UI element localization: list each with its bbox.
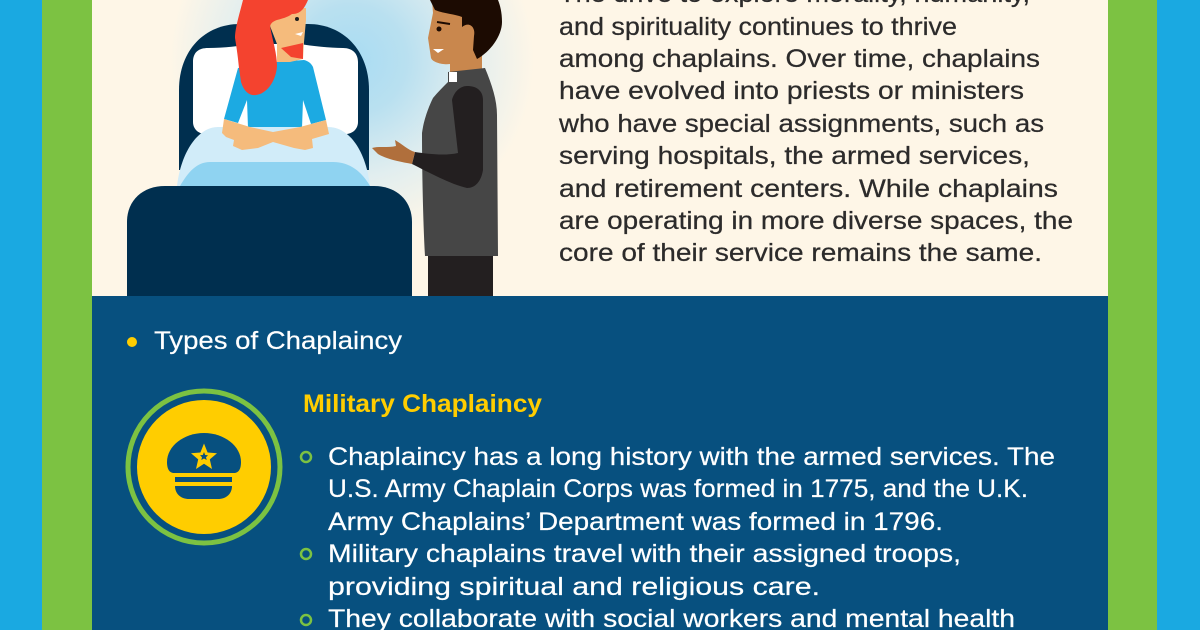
bullet [127, 337, 137, 347]
list item 2: providing spiritual and religious care. [328, 573, 820, 601]
list item 2 [301, 540, 961, 601]
chaplain: neck and face [428, 0, 482, 76]
woman: hair [235, 0, 308, 95]
chaplain: hand [372, 140, 415, 164]
panel: cream introduction [92, 0, 1108, 296]
text block: chaplain history: have evolved into priests or ministers [559, 77, 1024, 105]
chaplain: collar [449, 72, 457, 82]
chaplain: hair [430, 0, 502, 59]
text block: chaplain history: are operating in more diverse spaces, the [559, 207, 1073, 235]
pillow [193, 44, 358, 134]
text block: chaplain history: serving hospitals, the armed services, [559, 142, 1030, 170]
text block: chaplain history [558, 0, 1073, 267]
icon: military cap badge [128, 391, 280, 543]
chaplain: smile and eye [433, 22, 450, 53]
bed headboard [179, 24, 369, 170]
list item 2: Military chaplains travel with their assigned troops, [328, 540, 961, 568]
woman: hair lock [281, 43, 303, 59]
chaplain: pants [428, 250, 493, 296]
blanket fold [180, 162, 370, 186]
list item 1: Chaplaincy has a long history with the armed services. The [328, 443, 1055, 471]
text block: chaplain history: among chaplains. Over time, chaplains [559, 45, 1040, 73]
text block: chaplain history: core of their service remains the same. [559, 239, 1042, 267]
text block: chaplain history: and retirement centers. While chaplains [559, 175, 1058, 203]
text block: chaplain history: who have special assignments, such as [558, 110, 1044, 138]
blanket [177, 127, 370, 186]
woman: arms and hands [222, 119, 329, 150]
bed footboard [127, 186, 412, 296]
list item 1 [301, 443, 1055, 536]
chaplain: sleeve [412, 86, 483, 188]
illustration glow [165, 0, 540, 250]
panel: types of chaplaincy [92, 296, 1108, 630]
woman: eye and smile [295, 17, 303, 36]
chaplain: vest [422, 68, 498, 256]
list item 1: Army Chaplains’ Department was formed in 1796. [328, 508, 943, 536]
heading: Types of Chaplaincy [154, 327, 403, 355]
subheading: military chaplaincy: Military Chaplaincy [303, 390, 542, 418]
woman: shirt [224, 60, 326, 128]
list item 1: U.S. Army Chaplain Corps was formed in 1775, and the U.K. [328, 475, 1028, 503]
illustration: chaplain visiting patient in bed [127, 0, 502, 296]
text block: chaplain history: and spirituality continues to thrive [559, 13, 957, 41]
woman: neck and face [270, 8, 306, 62]
